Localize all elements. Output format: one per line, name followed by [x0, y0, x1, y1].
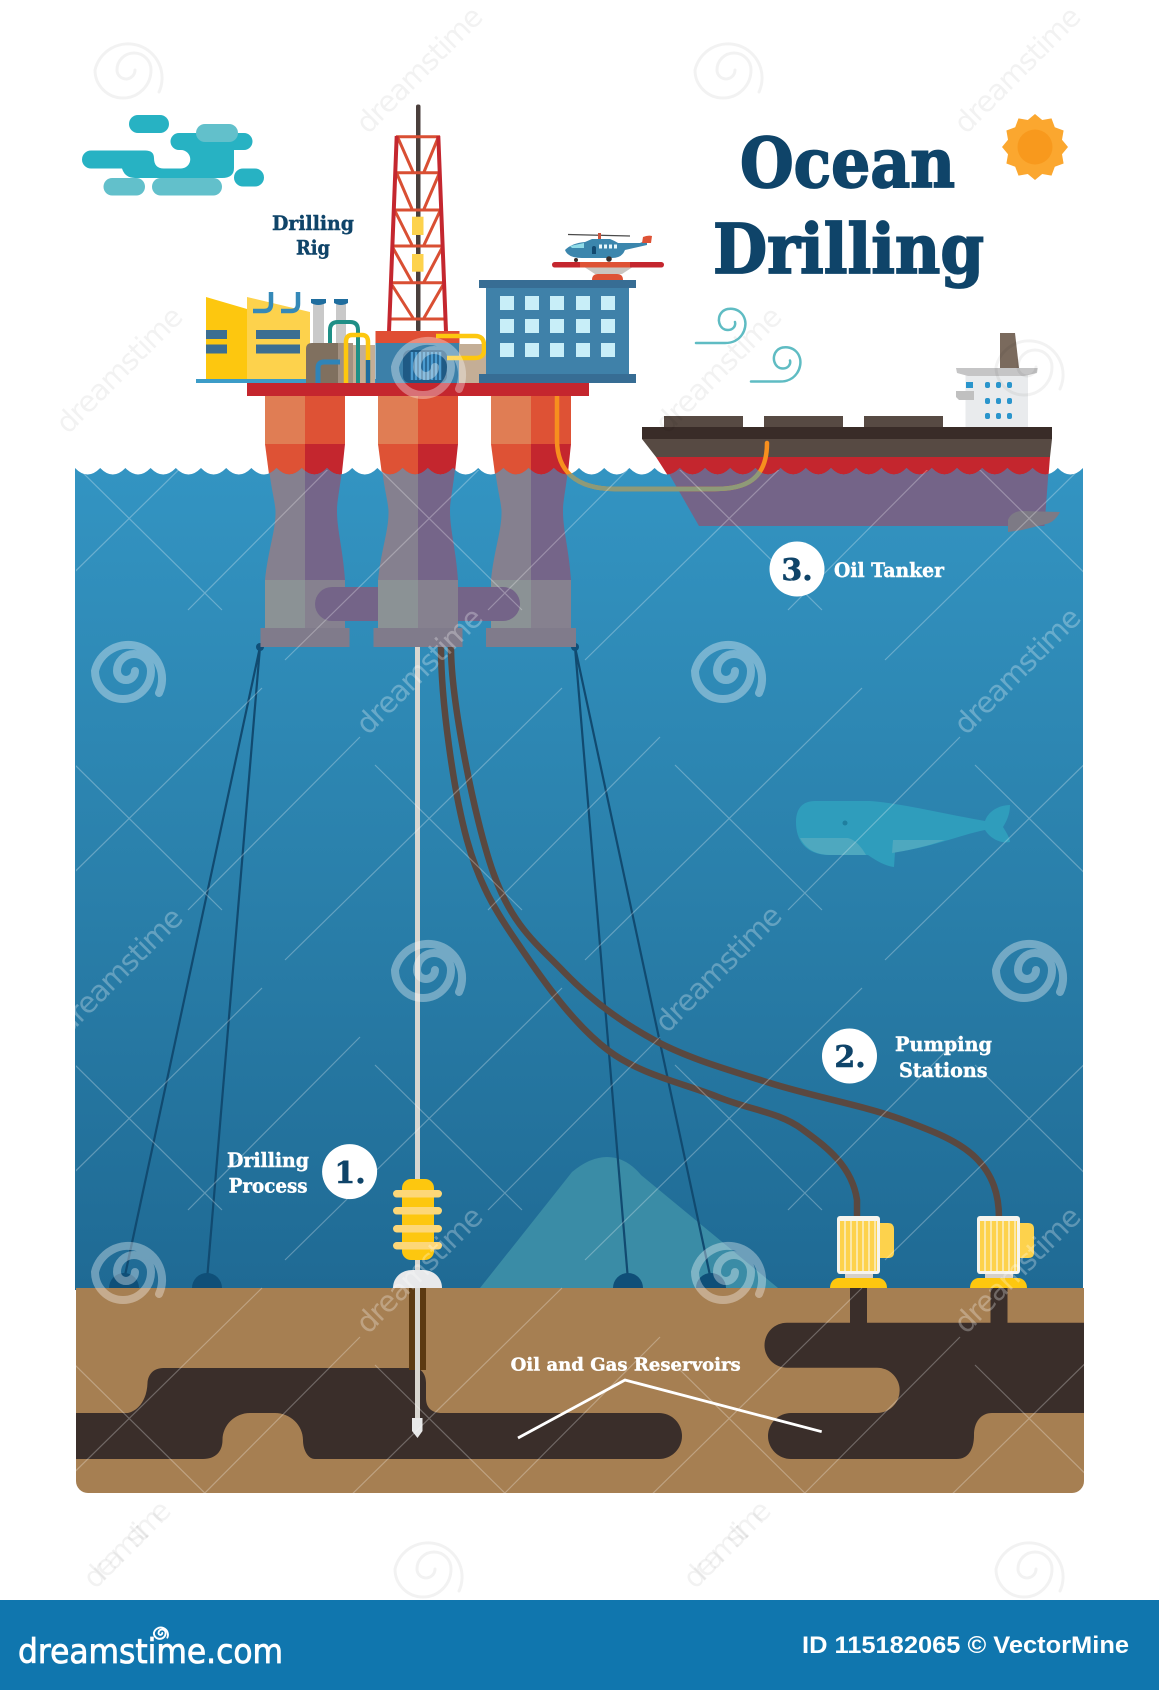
helipad	[552, 262, 664, 280]
watermark: brand text on water: dreamstime	[349, 600, 490, 741]
watermark: spirals on water	[95, 341, 1063, 1300]
label: drilling process: Drilling	[227, 1148, 309, 1172]
icon: sun	[1002, 114, 1068, 180]
reservoir pointer lines	[518, 1380, 822, 1438]
label: pumping stations	[895, 1032, 992, 1082]
derrick tower	[389, 104, 447, 332]
icon: wind swirl 1	[696, 309, 745, 343]
tanker rudder	[1008, 511, 1060, 532]
number badge 1: 1.	[334, 1156, 366, 1191]
watermark: brand text on white: dreamstime	[676, 1493, 778, 1595]
watermark: brand text on water	[49, 600, 1088, 1340]
left oil reservoir	[76, 1368, 682, 1459]
watermark: brand text on water: dreamstime	[947, 600, 1088, 741]
loading hose below water	[566, 470, 762, 492]
title	[713, 124, 984, 290]
underwater centre rig leg	[374, 460, 462, 647]
label: drilling rig: Rig	[296, 236, 330, 260]
watermark: brand text on white: dreamstime	[947, 0, 1088, 140]
watermark: brand text on water: dreamstime	[648, 898, 789, 1039]
title: Drilling	[713, 210, 984, 290]
accommodation building	[479, 280, 636, 383]
mooring lines	[124, 647, 711, 1280]
above-water rig legs	[265, 396, 571, 482]
rig crossbar	[315, 587, 520, 621]
footer logo: dreamstime.com	[18, 1632, 283, 1672]
number badge 2	[822, 1028, 877, 1084]
number badge 1	[322, 1144, 377, 1199]
label: oil tanker: Oil Tanker	[834, 558, 944, 582]
blowout preventer	[393, 1179, 442, 1288]
tanker hull below water	[664, 465, 1049, 526]
helicopter	[565, 233, 652, 262]
loading hose above water	[557, 383, 767, 489]
pumping station 2	[970, 1216, 1034, 1324]
mooring anchors	[109, 643, 726, 1288]
watermark: spirals on white	[95, 44, 1063, 1597]
drill pipe	[415, 647, 420, 1287]
whale	[796, 801, 1010, 867]
seabed mountain	[480, 1157, 778, 1288]
watermark: brand text on water: dreamstime	[49, 900, 190, 1041]
label: drilling rig	[272, 211, 354, 260]
watermark: brand text on white: dreamstime	[648, 299, 789, 440]
label: pumping stations: Pumping	[895, 1032, 992, 1056]
pumping station 1	[830, 1216, 894, 1324]
central drilling machinery	[376, 331, 486, 383]
label: pumping stations: Stations	[899, 1058, 988, 1082]
watermark: brand text on white: dreamstime	[49, 299, 190, 440]
oil pipelines	[441, 647, 999, 1218]
footer bar	[0, 1600, 1159, 1690]
clouds	[82, 115, 264, 196]
title: Ocean	[740, 124, 955, 204]
label: drilling process	[227, 1148, 309, 1198]
label: drilling process: Process	[229, 1174, 308, 1198]
label: drilling rig: Drilling	[272, 211, 354, 235]
watermark: diagonal lines	[76, 470, 1084, 1493]
factory buildings	[206, 292, 310, 379]
watermark: brand text on white: dreamstime	[349, 0, 490, 140]
oil tanker hull above water	[642, 416, 1052, 482]
label: oil and gas reservoirs: Oil and Gas Reservoirs	[511, 1355, 741, 1376]
well casing and drill bit	[409, 1288, 426, 1438]
watermark: brand text on white: dreamstime	[76, 1493, 178, 1595]
icon: wind swirl 2	[751, 347, 800, 382]
deck walkway and platform	[196, 379, 589, 396]
chimneys and process pipes	[306, 299, 375, 383]
tanker superstructure	[956, 333, 1038, 427]
number badge 3: 3.	[781, 553, 813, 588]
seabed soil	[76, 1288, 1084, 1493]
watermark: brand text on water: dreamstime	[947, 1199, 1088, 1340]
right oil reservoir	[765, 1323, 1084, 1459]
watermark: brand text on water: dreamstime	[349, 1199, 490, 1340]
underwater outer rig legs	[260, 460, 576, 647]
number badge 2: 2.	[834, 1040, 866, 1075]
footer credit: ID 115182065 © VectorMine	[802, 1632, 1129, 1659]
number badge 3	[770, 542, 824, 596]
ocean water	[75, 468, 1083, 1290]
